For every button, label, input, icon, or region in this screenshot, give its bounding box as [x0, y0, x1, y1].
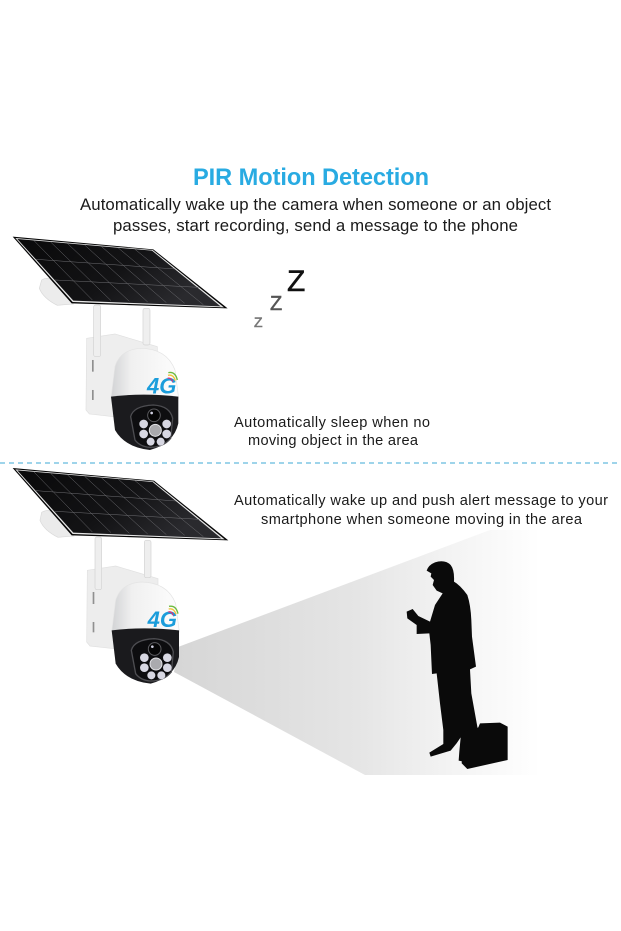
detection cone: [174, 530, 540, 775]
icon: 4G logo: 4G: [147, 607, 177, 632]
briefcase: [462, 723, 508, 769]
lens housing: [131, 405, 173, 447]
wake caption: smartphone when someone moving in the area: [261, 512, 583, 528]
solar camera: awake, motion detected: [12, 468, 228, 684]
camera dome: [111, 348, 179, 398]
solar camera: sleeping: [13, 237, 228, 450]
back plate: [86, 334, 157, 417]
antennas: [94, 305, 150, 357]
plate slots: [92, 360, 94, 400]
mounting plate: [87, 566, 158, 649]
black head: [112, 628, 179, 684]
second solar panel: [13, 468, 228, 540]
wake caption: Automatically wake up and push alert message to your: [234, 493, 608, 509]
person silhouette with briefcase: [407, 561, 508, 769]
twin antennas: [95, 537, 151, 590]
wall mount: [39, 278, 73, 305]
sleep icon: z z z: Z: [270, 293, 282, 315]
camera head: [111, 395, 178, 450]
lens and LEDs: [131, 639, 173, 681]
icon: 4G badge: 4G: [146, 373, 176, 398]
dashed divider: [0, 462, 621, 464]
sleep icon: z z z: [254, 265, 305, 330]
person: [407, 561, 477, 762]
sleep caption: moving object in the area: [248, 433, 419, 449]
white dome: [112, 582, 179, 632]
sleep caption: Automatically sleep when no: [234, 415, 430, 431]
intro text: Automatically wake up the camera when someone or an object: [80, 195, 551, 214]
title: PIR Motion Detection: [193, 165, 429, 191]
wake caption: [234, 493, 608, 528]
solar panel: [13, 237, 228, 308]
mounting slots: [93, 592, 94, 632]
wall bracket: [40, 510, 74, 537]
intro text: [80, 195, 551, 235]
sleep icon: z z z: Z: [287, 265, 305, 298]
intro text: passes, start recording, send a message to the phone: [113, 216, 518, 235]
sleep caption: [234, 415, 430, 449]
sleep icon: z z z: Z: [254, 314, 263, 330]
